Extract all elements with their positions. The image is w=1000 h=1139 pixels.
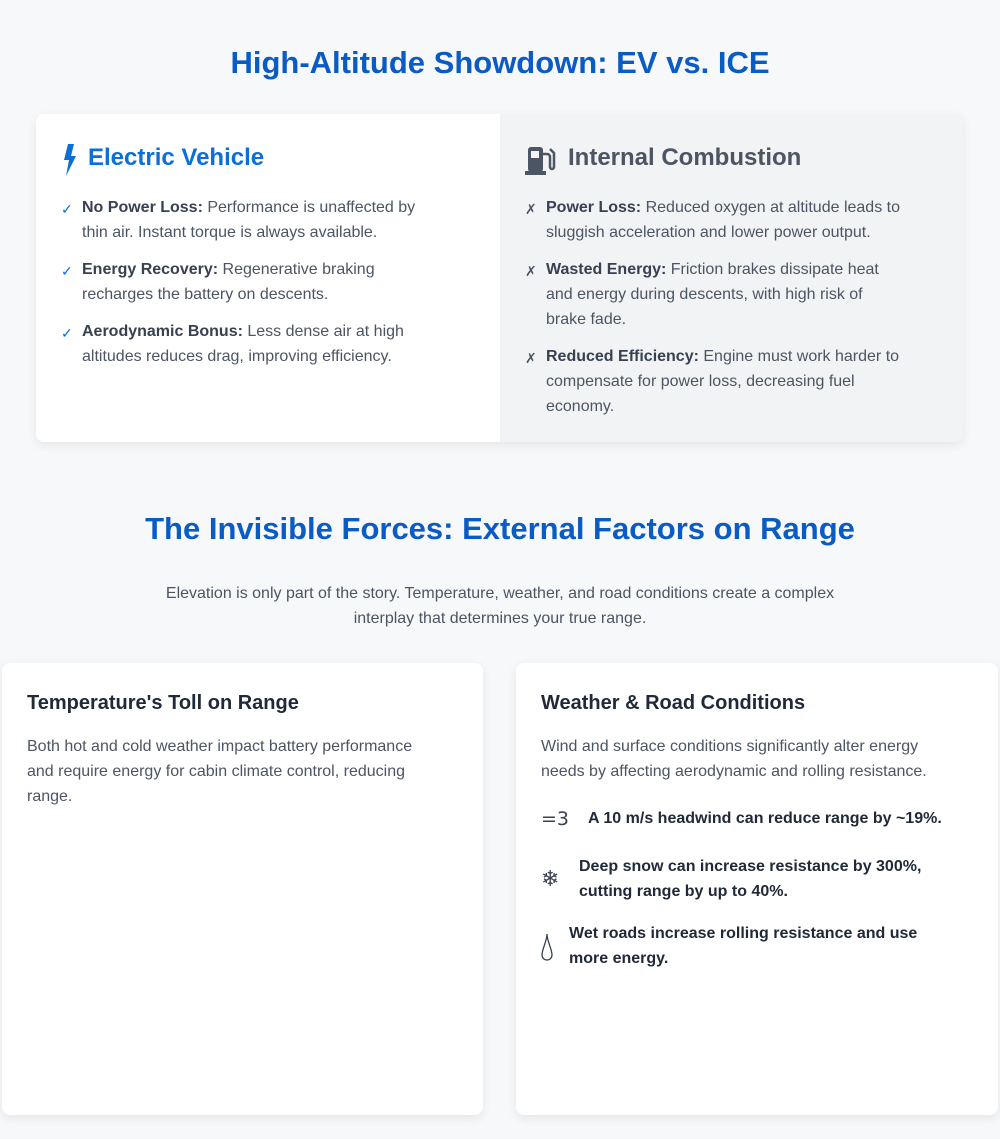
item: energy recovery: Energy Recovery: Regenerative braking recharges the battery on descents. (82, 261, 375, 303)
panel: electric vehicle: ✓ (61, 263, 73, 279)
heading: electric vehicle: Electric Vehicle (88, 144, 264, 171)
panel: temperature (2, 663, 483, 1115)
panel: internal combustion: ✗ (525, 201, 537, 217)
panel: electric vehicle: ✓ (61, 201, 73, 217)
icon: snowflake: ❄ (541, 866, 559, 891)
panel: comparison (36, 114, 963, 442)
item: wet roads: Wet roads increase rolling resistance and use more energy. (569, 925, 917, 967)
heading: weather: Weather & Road Conditions (541, 692, 805, 714)
item: wind (541, 808, 942, 830)
heading: internal combustion: Internal Combustion (568, 144, 801, 171)
icon: fuel pump (525, 147, 556, 175)
text: weather: Wind and surface conditions significantly alter energy needs by affecting aerodynamic and rolling resistance. (541, 738, 927, 780)
panel: weather (516, 663, 998, 1115)
item: reduced efficiency: Reduced Efficiency: Engine must work harder to compensate for power loss, decreasing fuel economy. (546, 348, 899, 415)
panel: internal combustion: ✗ (525, 263, 537, 279)
icon: wind: =3 (541, 808, 569, 830)
text: temperature: Both hot and cold weather impact battery performance and require energy for cabin climate control, reducing range. (27, 738, 412, 805)
item: aerodynamic bonus: Aerodynamic Bonus: Less dense air at high altitudes reduces drag, improving efficiency. (82, 323, 404, 365)
panel: internal combustion: ✗ (525, 350, 537, 366)
item: wasted energy: Wasted Energy: Friction brakes dissipate heat and energy during descents, with high risk of brake fade. (546, 261, 879, 328)
panel: internal combustion (500, 114, 963, 442)
item: power loss: Power Loss: Reduced oxygen at altitude leads to sluggish acceleration and lower power output. (546, 199, 900, 241)
item: wind: A 10 m/s headwind can reduce range by ~19%. (588, 810, 942, 827)
heading: temperature: Temperature's Toll on Range (27, 692, 299, 714)
panel: electric vehicle: ✓ (61, 325, 73, 341)
panel: electric vehicle (36, 114, 500, 442)
title: High-Altitude Showdown: EV vs. ICE (230, 45, 770, 80)
icon: drop (541, 934, 553, 961)
text: intro: Elevation is only part of the story. Temperature, weather, and road conditions create a complex interplay that determines your true range. (166, 585, 834, 627)
item: snow: Deep snow can increase resistance by 300%, cutting range by up to 40%. (579, 858, 921, 900)
heading: invisible forces: The Invisible Forces: External Factors on Range (145, 511, 855, 546)
item: no power loss: No Power Loss: Performance is unaffected by thin air. Instant torque is always available. (82, 199, 415, 241)
icon: lightning (64, 144, 76, 176)
